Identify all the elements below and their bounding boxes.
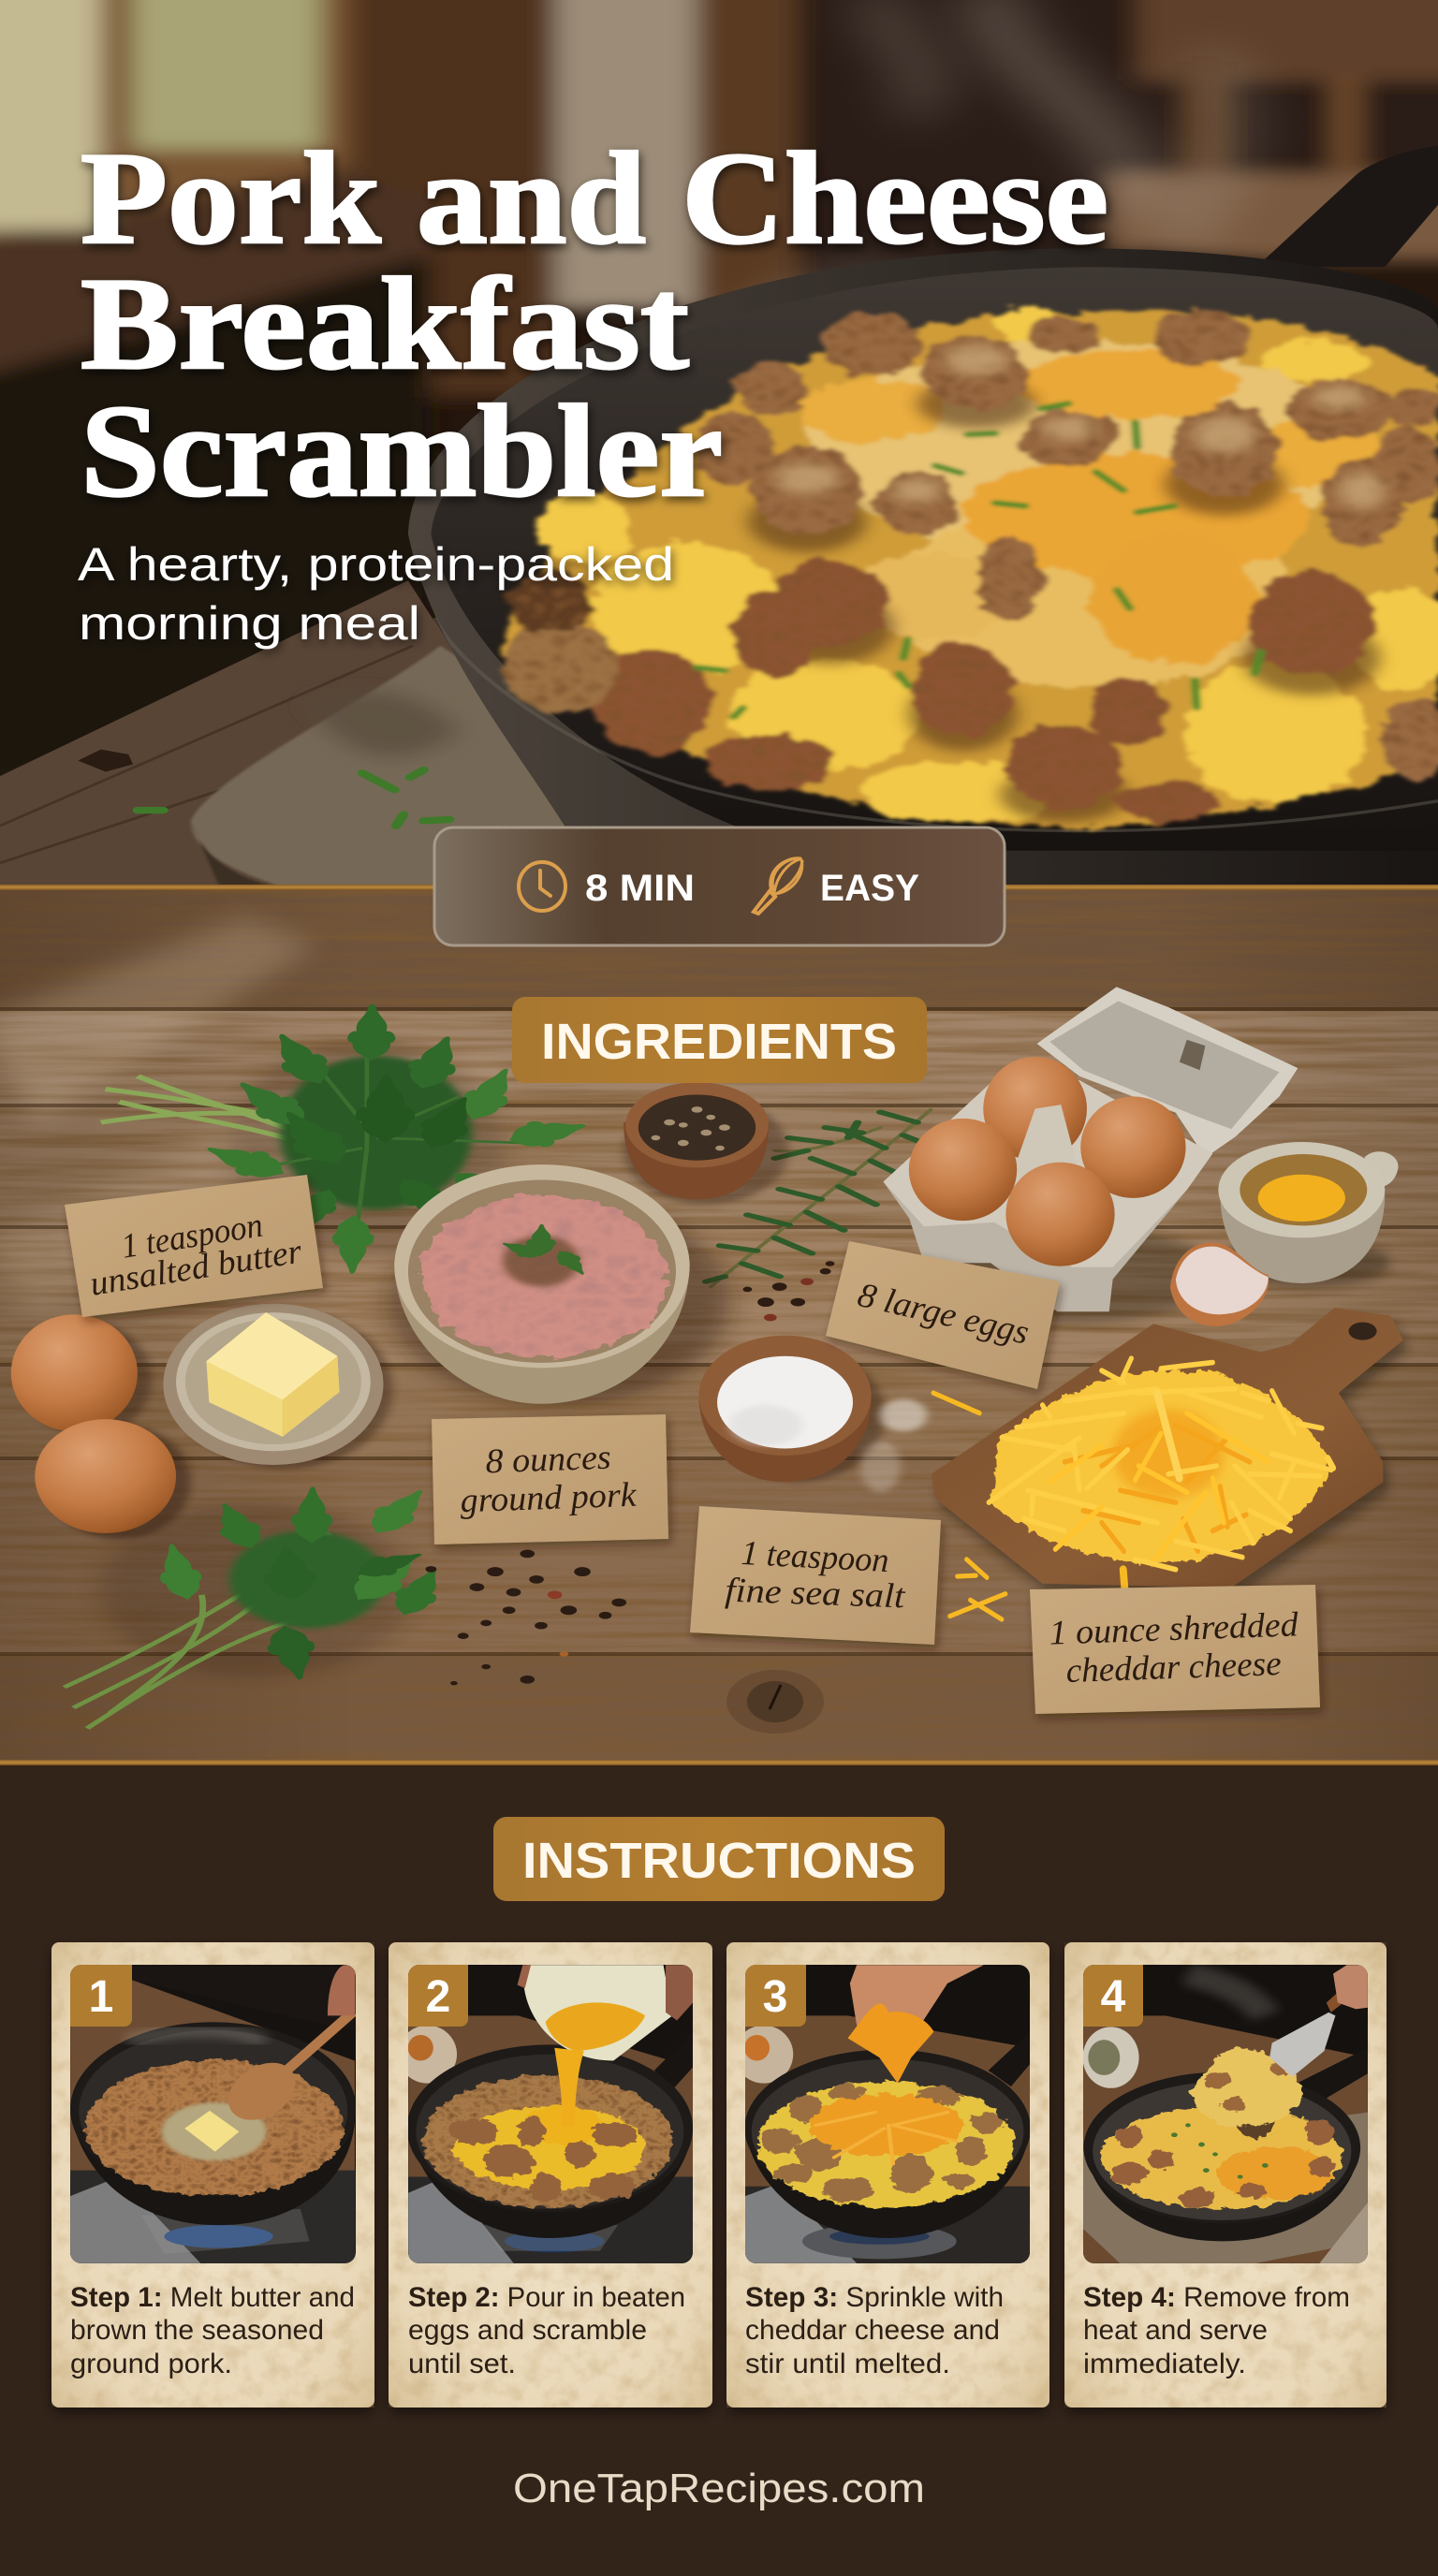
step 3 text: stir until melted.: [745, 2349, 950, 2379]
title: Pork and Cheese: [81, 125, 1108, 271]
loose cheddar shreds: [933, 1393, 1124, 1619]
number badge 3: [745, 1965, 806, 2027]
sausage shadows: [747, 379, 1380, 823]
number badge 2: [408, 1965, 468, 2027]
steam: [752, 0, 1232, 366]
spilled salt: [860, 1398, 927, 1492]
subtitle: [78, 538, 674, 650]
icon: whisk: [754, 858, 802, 914]
bowl: ground pork: [389, 1164, 729, 1405]
chives on table: [138, 769, 449, 826]
bowl: peppercorns: [624, 1082, 788, 1205]
cup with egg yolk: [1218, 1142, 1398, 1287]
number badge 4: 4: [1101, 1972, 1126, 2022]
step card 2: [389, 1942, 712, 2408]
scrambled egg clumps: [541, 307, 1438, 822]
ingredient label: pork: 8 ounces: [485, 1439, 611, 1481]
photo: browning pork: [69, 1964, 360, 2264]
step 4 text: heat and serve: [1083, 2315, 1268, 2346]
skillet: [408, 146, 1438, 888]
number badge 1: [70, 1965, 132, 2027]
step 3 text: Step 3: Sprinkle with: [745, 2282, 1004, 2313]
pork sausage chunks: [697, 311, 1438, 779]
melted cheese: [798, 342, 1385, 689]
shredded cheddar: [989, 1358, 1333, 1570]
cheese highlights on sausages: [775, 344, 1385, 509]
step 1 text: ground pork.: [70, 2349, 232, 2379]
difficulty label: EASY: [820, 868, 919, 909]
step 2 text: eggs and scramble: [408, 2315, 647, 2346]
linen cloth: [191, 646, 734, 888]
step 1 text: [70, 2282, 355, 2379]
wood planks: [0, 889, 1438, 1762]
photo: sprinkling cheddar: [734, 1964, 1034, 2264]
cutting board: [932, 1308, 1409, 1597]
ingredient art drawn in zoom coordinates: [11, 1004, 935, 1728]
step 4 text: immediately.: [1083, 2349, 1246, 2379]
step 1 text: Step 1: Melt butter and: [70, 2282, 355, 2313]
ingredient label: cheddar: 1 ounce shredded: [1049, 1605, 1299, 1653]
panel: instructions background: [0, 1760, 1438, 2576]
scramble base: [500, 311, 1438, 826]
time and difficulty badge: [434, 827, 1005, 945]
step 3 text: [745, 2282, 1004, 2379]
subtitle: morning meal: [79, 597, 420, 650]
egg left 2: [35, 1419, 191, 1540]
heading: ingredients: INGREDIENTS: [541, 1014, 897, 1070]
time label: 8 MIN: [585, 868, 695, 909]
ingredient label: eggs: 8 large eggs: [854, 1276, 1033, 1353]
ingredient label: salt: fine sea salt: [725, 1572, 907, 1616]
photo: pouring eggs: [398, 1964, 696, 2264]
photo: serving: [1079, 1964, 1370, 2264]
chives garnish: [697, 403, 1261, 717]
heading: instructions: [493, 1817, 945, 1901]
icon: clock: [519, 862, 565, 911]
step 4 text: [1083, 2282, 1350, 2379]
ingredient label: salt: 1 teaspoon: [741, 1534, 890, 1580]
butter dish: [163, 1304, 392, 1469]
title: Scrambler: [81, 378, 723, 524]
number badge 1: 1: [89, 1972, 113, 2022]
panel: hero photo: [0, 0, 1438, 894]
ingredient label: pork: [432, 1414, 668, 1544]
heading: ingredients: [512, 997, 927, 1083]
ingredient label: salt: [690, 1506, 941, 1645]
gold divider bottom: [0, 1760, 1438, 1765]
step 4 text: Step 4: Remove from: [1083, 2282, 1350, 2313]
egg left 1: [11, 1314, 152, 1437]
ingredient label: pork: ground pork: [460, 1476, 638, 1520]
wood knot: [726, 1670, 824, 1734]
step 2 text: until set.: [408, 2349, 516, 2379]
eggs, board and cheese in close-up coordinates: [883, 987, 1409, 1619]
herb: parsley bottom left: [65, 1484, 454, 1728]
step card 4: [1064, 1942, 1387, 2408]
peppercorns scatter near rosemary: [742, 1261, 834, 1321]
peppercorn scatter: [426, 1550, 626, 1685]
ingredient label: butter: unsalted butter: [87, 1232, 305, 1304]
ingredient label: butter: [65, 1175, 323, 1317]
step 3 text: cheddar cheese and: [745, 2315, 1000, 2346]
skillet food: [500, 307, 1438, 826]
ingredient label: cheddar: [1030, 1585, 1320, 1714]
ingredient label: eggs: [826, 1241, 1060, 1389]
wooden table: [0, 580, 606, 888]
ingredient label: butter: 1 teaspoon: [119, 1207, 265, 1266]
heading: instructions: INSTRUCTIONS: [522, 1833, 916, 1889]
footer brand: OneTapRecipes.com: [513, 2466, 925, 2511]
gold divider top: [0, 885, 1438, 890]
rustic background: [0, 0, 1438, 894]
step 2 text: [408, 2282, 685, 2379]
title: Breakfast: [81, 251, 689, 397]
step 2 text: Step 2: Pour in beaten: [408, 2282, 685, 2313]
panel: ingredients table: [0, 889, 1438, 1762]
number badge 3: 3: [763, 1972, 787, 2022]
number badge 4: [1083, 1965, 1143, 2027]
egg carton: [883, 987, 1298, 1324]
herb: parsley top left: [101, 1004, 594, 1274]
step 1 text: brown the seasoned: [70, 2315, 324, 2346]
bowl: sea salt: [698, 1336, 885, 1482]
ingredient label: cheddar: cheddar cheese: [1065, 1645, 1282, 1690]
broken egg shell: [1170, 1242, 1269, 1326]
subtitle: A hearty, protein-packed: [78, 538, 674, 591]
step card 1: [51, 1942, 374, 2408]
herb: rosemary sprig: [706, 1109, 935, 1287]
step card 3: [726, 1942, 1049, 2408]
title: [81, 125, 1108, 524]
number badge 2: 2: [426, 1972, 450, 2022]
